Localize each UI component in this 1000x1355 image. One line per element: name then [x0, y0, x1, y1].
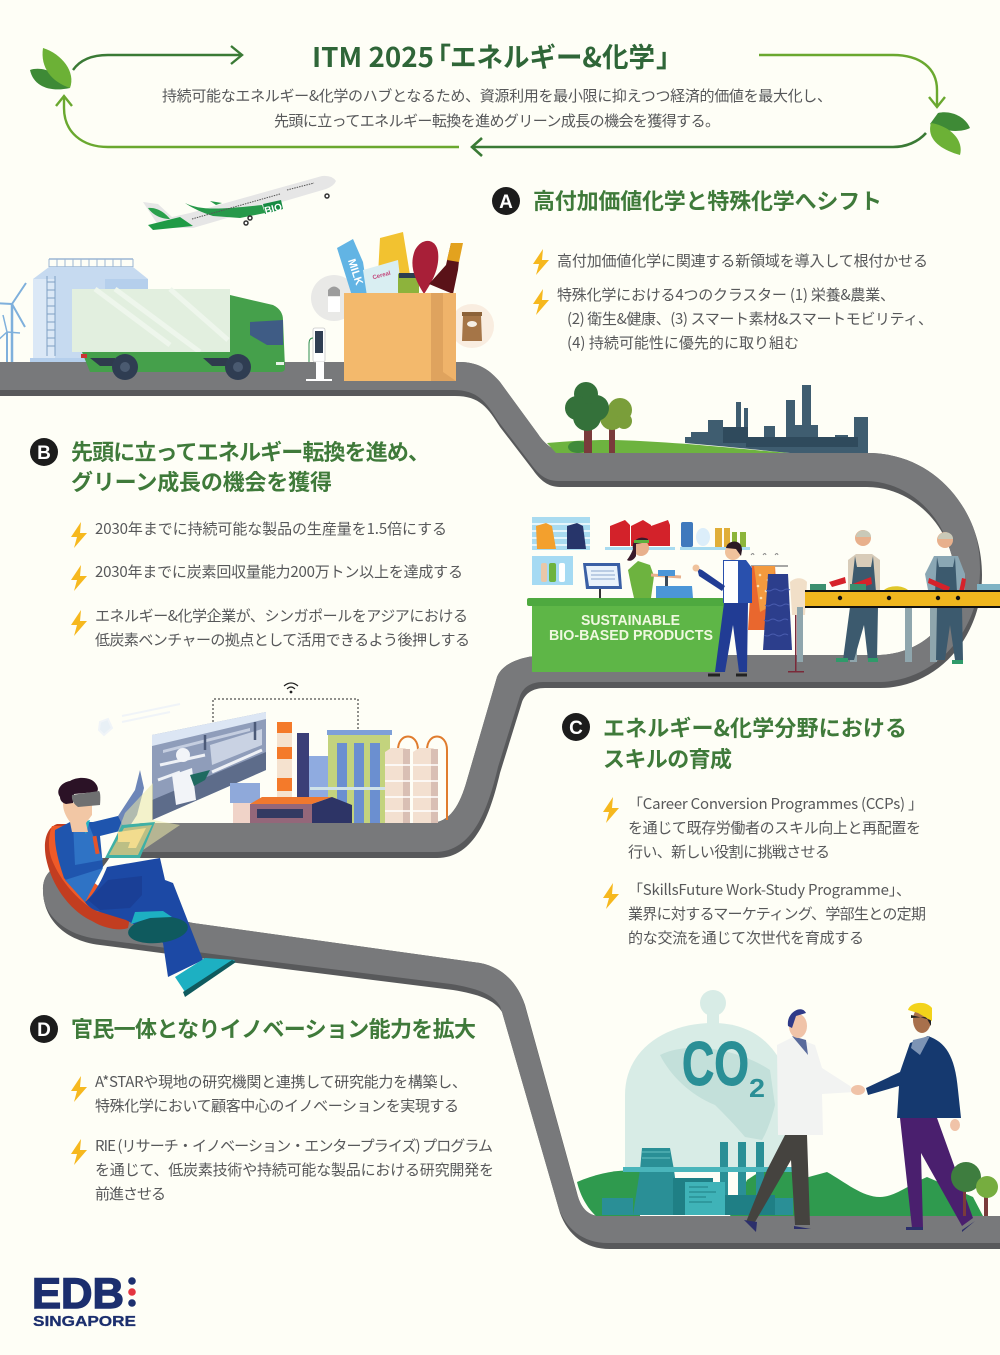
section D bullets: を通じて、低炭素技術や持続可能な製品における研究開発を — [95, 1159, 494, 1180]
intro text: 先頭に立ってエネルギー転換を進めグリーン成長の機会を獲得する。 — [274, 110, 720, 131]
illustration: park and factory skyline — [547, 382, 868, 453]
customer — [692, 542, 752, 675]
illustration: shopping bag — [311, 232, 494, 381]
illustration: smart factory — [99, 683, 447, 823]
badge A: A — [499, 192, 513, 213]
header — [30, 36, 970, 156]
intro text: 持続可能なエネルギー&化学のハブとなるため、資源利用を最小限に抑えつつ経済的価値を最大化し、 — [162, 85, 832, 106]
mannequin — [788, 578, 807, 672]
torso — [55, 815, 124, 902]
icon: bolt — [603, 797, 619, 823]
intro text — [162, 85, 832, 131]
section A bullets: 特殊化学における4つのクラスター (1) 栄養&農業、 — [557, 284, 895, 305]
smoke — [660, 1048, 775, 1140]
hill — [547, 440, 790, 453]
arrow: top right — [759, 55, 945, 107]
counter — [532, 603, 724, 672]
title: 「 — [424, 36, 451, 75]
worker — [925, 532, 966, 662]
conveyor legs — [797, 607, 937, 662]
vest — [65, 820, 103, 902]
factory skyline — [685, 385, 868, 453]
icon: bolt — [533, 249, 549, 275]
tree — [565, 382, 632, 453]
clothes rack — [748, 554, 792, 650]
tablet — [105, 822, 155, 858]
section A bullets — [533, 249, 933, 353]
icon: bolt — [71, 610, 87, 636]
bottle panel — [532, 556, 573, 585]
illustration: CO2 capture — [577, 990, 998, 1232]
icon: bolt — [71, 522, 87, 548]
red cans — [610, 520, 670, 546]
CO2 label: 2 — [749, 1073, 765, 1103]
illustration: silo — [30, 259, 148, 362]
section D bullets: 特殊化学において顧客中心のイノベーションを実現する — [95, 1095, 459, 1116]
title: 」 — [656, 36, 683, 75]
section C heading: エネルギー&化学分野における — [603, 711, 907, 743]
icon: left leaves — [30, 48, 71, 89]
illustration: man with VR headset — [45, 770, 236, 997]
section C bullets: 的な交流を通じて次世代を育成する — [628, 927, 864, 948]
section D bullets — [71, 1071, 494, 1204]
shoe: lower foot — [175, 958, 236, 997]
chair — [45, 824, 132, 929]
head — [58, 778, 100, 832]
engineer — [851, 1003, 975, 1232]
section C bullets: 「SkillsFuture Work-Study Programme」、 — [628, 879, 911, 900]
road — [0, 356, 1000, 1249]
section C heading — [562, 711, 907, 774]
monitor — [583, 563, 622, 598]
blue tank — [230, 783, 260, 823]
illustration: truck — [72, 289, 285, 380]
register — [656, 570, 693, 598]
section B heading — [30, 435, 430, 497]
section B bullets: エネルギー&化学企業が、シンガポールをアジアにおける — [95, 605, 468, 626]
dotted connection — [213, 699, 358, 730]
icon: bolt — [71, 1076, 87, 1102]
milk carton: MILK — [345, 257, 365, 287]
icon: salt shaker circle — [311, 275, 357, 321]
logo: EDB Singapore: EDB — [32, 1270, 124, 1318]
cashier — [627, 538, 681, 598]
section D bullets: RIE (リサーチ・イノベーション・エンタープライズ) プログラム — [95, 1135, 493, 1156]
badge D — [30, 1015, 58, 1043]
section B bullets — [71, 518, 470, 650]
section C bullets: 行い、新しい役割に挑戦させる — [628, 841, 830, 862]
green building — [309, 730, 392, 823]
section C bullets: 「Career Conversion Programmes (CCPs) 」 — [628, 793, 923, 814]
title: ITM 2025 — [312, 36, 434, 75]
icon: pack circle — [450, 304, 494, 348]
section C bullets: を通じて既存労働者のスキル向上と再配置を — [628, 817, 921, 838]
doctor — [744, 1009, 855, 1232]
section A bullets: (4) 持続可能性に優先的に取り組む — [567, 332, 799, 353]
logo: EDB Singapore — [32, 1270, 136, 1330]
orange chimney — [277, 722, 292, 797]
shoe: top foot — [127, 911, 189, 946]
section D heading: 官民一体となりイノベーション能力を拡大 — [71, 1012, 476, 1044]
icon: bolt — [71, 565, 87, 591]
arrow: bottom left — [56, 96, 459, 147]
pants — [85, 858, 203, 977]
detergent bottles — [681, 522, 746, 547]
section B bullets: 2030年までに持続可能な製品の生産量を1.5倍にする — [95, 518, 447, 539]
section A heading: 高付加価値化学と特殊化学へシフト — [533, 184, 882, 216]
section C bullets: 業界に対するマーケティング、学部生との定期 — [628, 903, 926, 924]
icon: bolt — [71, 1139, 87, 1165]
milk carton — [337, 239, 368, 296]
title: エネルギー&化学 — [450, 36, 655, 75]
CO2 label: CO — [682, 1030, 749, 1099]
projection beam — [108, 783, 180, 857]
dark chimney — [297, 733, 309, 797]
ring — [623, 1167, 795, 1172]
illustration: bio-based products store — [527, 517, 1000, 675]
icon: bolt — [603, 883, 619, 909]
hills — [577, 1163, 983, 1216]
icon: bolt — [533, 289, 549, 315]
logo: EDB Singapore: SINGAPORE — [33, 1313, 136, 1330]
section B bullets: 低炭素ベンチャーの拠点として活用できるよう後押しする — [95, 629, 470, 650]
section B heading: グリーン成長の機会を獲得 — [71, 465, 332, 497]
power plant — [602, 1142, 793, 1215]
section A bullets: (2) 衛生&健康、(3) スマート素材&スマートモビリティ、 — [567, 308, 933, 329]
badge D: D — [37, 1020, 51, 1041]
arrow: bottom right — [472, 133, 926, 156]
badge C — [562, 713, 590, 741]
illustration: wind turbines — [0, 283, 26, 362]
illustration: EV charger — [306, 328, 332, 381]
section D bullets: A*STARや現地の研究機関と連携して研究能力を構築し、 — [95, 1071, 467, 1092]
counter label: BIO-BASED PRODUCTS — [549, 628, 713, 644]
illustration: shopping bag: Cereal — [372, 271, 392, 281]
shirts panel — [532, 517, 590, 550]
section B bullets: 2030年までに炭素回収量能力200万トン以上を達成する — [95, 561, 463, 582]
worker — [829, 530, 880, 660]
section D bullets: 前進させる — [95, 1183, 166, 1204]
illustration: plane — [143, 176, 336, 230]
arrow: top left — [73, 46, 242, 70]
label: BIO: BIO — [263, 202, 284, 217]
hologram screen — [152, 712, 266, 820]
counter label: SUSTAINABLE — [581, 613, 680, 629]
counter label — [549, 613, 713, 644]
icon: wifi — [284, 683, 298, 693]
brick factory — [250, 797, 352, 823]
storage tanks — [385, 736, 447, 823]
section B heading: 先頭に立ってエネルギー転換を進め、 — [71, 435, 430, 467]
section A bullets: 高付加価値化学に関連する新領域を導入して根付かせる — [557, 250, 928, 271]
badge B — [30, 438, 58, 466]
title — [312, 36, 683, 75]
badge C: C — [569, 718, 583, 739]
ghost panel — [99, 704, 180, 735]
section C bullets — [603, 793, 926, 948]
trees — [951, 1162, 998, 1216]
badge A — [492, 187, 520, 215]
dome — [625, 990, 785, 1168]
conveyor — [805, 584, 1000, 608]
raised arm — [118, 770, 144, 832]
icon: right leaves — [930, 112, 970, 155]
badge B: B — [37, 443, 51, 464]
section C heading: スキルの育成 — [603, 742, 732, 774]
